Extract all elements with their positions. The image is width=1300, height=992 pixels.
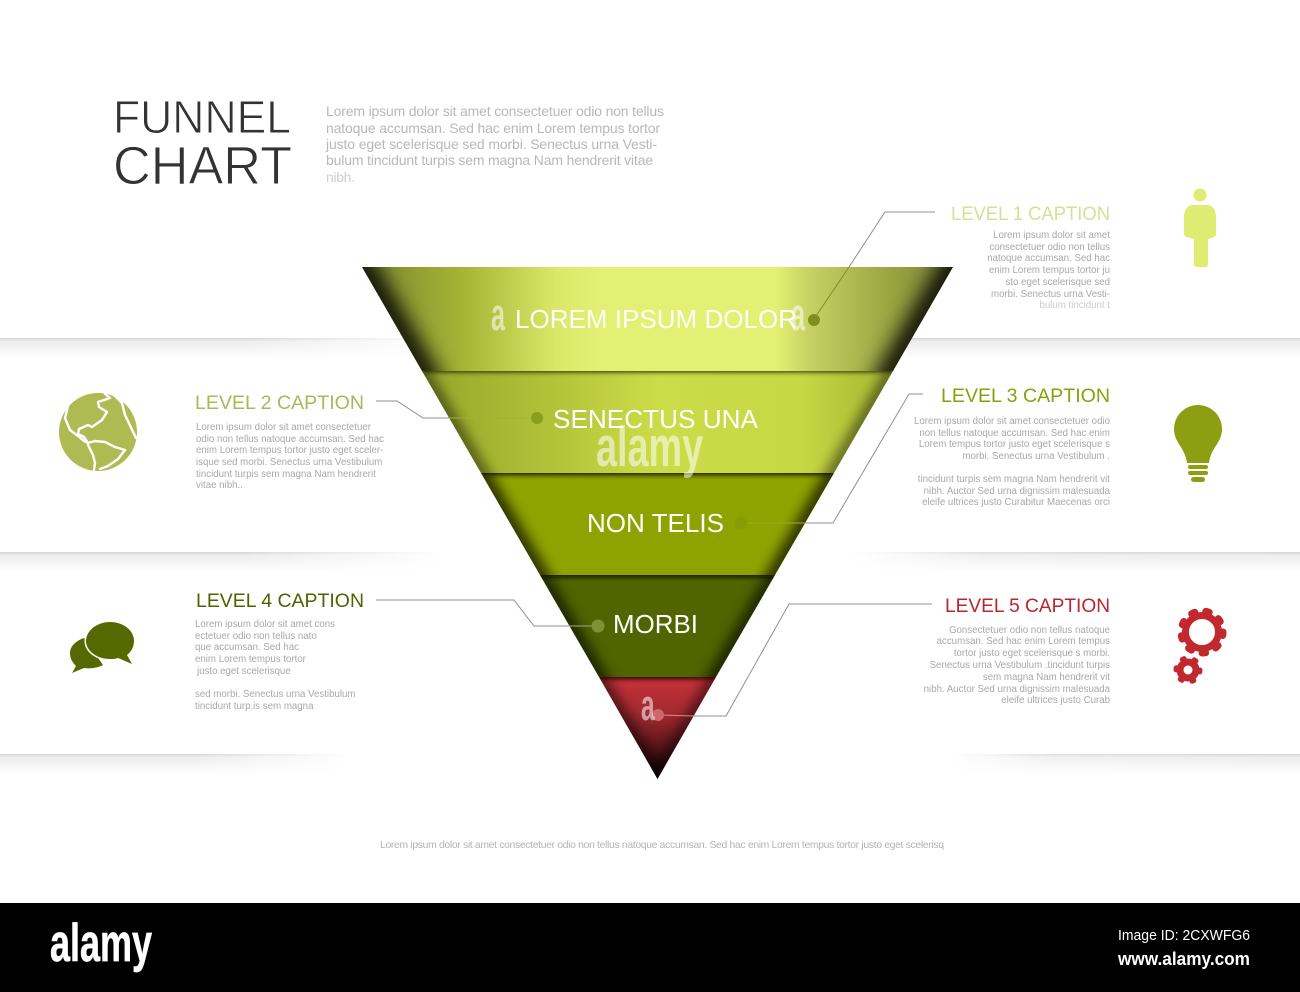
level 1 caption: bulum tincidunt t — [1039, 300, 1110, 311]
level 3 caption: LEVEL 3 CAPTION — [941, 385, 1110, 407]
marker dots — [531, 314, 820, 721]
level 1 caption: morbi. Senectus urna Vesti- — [991, 289, 1110, 300]
funnel level 5 — [599, 677, 716, 779]
funnel level 2 — [422, 371, 893, 473]
funnel labels: NON TELIS — [587, 508, 724, 538]
title: FUNNEL — [113, 91, 291, 143]
level 2 caption: enim Lorem tempus tortor justo eget sceler- — [196, 445, 383, 456]
funnel labels: MORBI — [613, 609, 698, 639]
level 1 caption: natoque accumsan. Sed hac — [987, 253, 1110, 264]
level 5 caption: Senectus urna Vestibulum .tincidunt turpis — [930, 660, 1110, 671]
paper strip shadow 3 — [0, 754, 1300, 774]
intro paragraph — [325, 103, 664, 185]
title — [113, 91, 292, 196]
level 2 caption: tincidunt turpis sem magna Nam hendrerit — [196, 469, 376, 480]
title: CHART — [113, 136, 292, 196]
intro paragraph: bulum tincidunt turpis sem magna Nam hendrerit vitae — [326, 152, 653, 168]
watermark: a — [641, 680, 655, 730]
level 4 caption: que accumsan. Sed hac — [195, 642, 299, 653]
level 3 caption: nibh. Auctor Sed urna dignissim malesuada — [924, 486, 1111, 497]
level 2 caption — [195, 392, 384, 491]
level 3 caption: tincidunt turpis sem magna Nam hendrerit vit — [918, 474, 1110, 485]
connector level 3 — [741, 394, 923, 523]
funnel level 4 — [540, 575, 775, 677]
level 4 caption: LEVEL 4 CAPTION — [196, 590, 364, 612]
funnel level 1 — [362, 267, 953, 371]
level 5 caption: sem magna Nam hendrerit vit — [983, 672, 1110, 683]
watermark: a — [791, 289, 806, 340]
level 1 caption: Lorem ipsum dolor sit amet — [993, 230, 1110, 241]
level 4 caption: ectetuer odio non tellus nato — [195, 631, 317, 642]
funnel labels: LOREM IPSUM DOLOR — [515, 304, 797, 334]
watermark: alamy — [596, 415, 703, 479]
level 4 caption: tincidunt turp.is sem magna — [195, 701, 314, 712]
funnel level 3 — [481, 473, 834, 575]
level 1 caption — [951, 203, 1110, 311]
footer logo: alamy — [50, 913, 152, 973]
connector level 2 — [376, 401, 537, 418]
level 5 caption: Gonsectetuer odio non tellus natoque — [949, 625, 1110, 636]
connector level 1 — [814, 212, 935, 319]
level 2 caption: Lorem ipsum dolor sit amet consectetuer — [196, 422, 372, 433]
level 4 caption: Lorem ipsum dolor sit amet cons — [195, 619, 335, 630]
funnel labels — [515, 304, 797, 639]
level 5 caption: nibh. Auctor Sed urna dignissim malesuada — [924, 684, 1111, 695]
level 4 caption: enim Lorem tempus tortor — [195, 654, 307, 665]
level 1 caption: LEVEL 1 CAPTION — [951, 203, 1110, 225]
level 4 caption: sed morbi. Senectus urna Vestibulum — [195, 689, 355, 700]
level 3 caption: Lorem tempus tortor justo eget scelerisque s — [919, 439, 1110, 450]
icon: gears — [1176, 611, 1223, 682]
level 3 caption — [914, 385, 1111, 508]
level 5 caption: LEVEL 5 CAPTION — [945, 595, 1110, 617]
watermark — [491, 289, 806, 730]
paper strip shadow 1 — [0, 338, 1300, 358]
intro paragraph: nibh. — [326, 169, 355, 185]
level 2 caption: LEVEL 2 CAPTION — [195, 392, 364, 414]
level 5 caption: tortor justo eget scelerisque s morbi. — [954, 648, 1110, 659]
level 5 caption — [924, 595, 1111, 706]
level 2 caption: isque sed morbi. Senectus urna Vestibulum — [196, 457, 382, 468]
level 5 caption: accumsan. Sed hac enim Lorem tempus — [937, 636, 1110, 647]
icon: chat bubbles — [70, 622, 134, 673]
level 2 caption: vitae nibh.. — [196, 480, 243, 491]
level 5 caption: eleife ultrices justo Curab — [1001, 695, 1110, 706]
watermark: a — [491, 289, 506, 340]
level 1 caption: sto eget scelerisque sed — [1006, 277, 1110, 288]
intro paragraph: Lorem ipsum dolor sit amet consectetuer odio non tellus — [326, 103, 664, 119]
icon: globe — [59, 393, 137, 471]
icon: person — [1184, 188, 1216, 267]
funnel chart — [350, 247, 965, 779]
connector level 4 — [376, 600, 598, 626]
intro paragraph: justo eget scelerisque sed morbi. Senectus urna Vesti- — [325, 136, 657, 152]
level 2 caption: odio non tellus natoque accumsan. Sed hac — [196, 434, 384, 445]
footer bar — [0, 903, 1300, 992]
level 3 caption: morbi. Senectus urna Vestibulum . — [962, 451, 1110, 462]
level 1 caption: consectetuer odio non tellus — [989, 242, 1110, 253]
level 3 caption: non tellus natoque accumsan. Sed hac enim — [919, 428, 1110, 439]
intro paragraph: natoque accumsan. Sed hac enim Lorem tempus tortor — [326, 120, 660, 136]
level 3 caption: eleife ultrices justo Curabitur Maecenas orci — [922, 497, 1110, 508]
level 3 caption: Lorem ipsum dolor sit amet consectetuer odio — [914, 416, 1110, 427]
funnel labels: SENECTUS UNA — [553, 404, 759, 434]
level 4 caption: justo eget scelerisque — [196, 666, 291, 677]
paper strip shadow 2 — [0, 552, 1300, 572]
level 4 caption — [195, 590, 364, 712]
icon: light bulb — [1174, 405, 1222, 482]
footnote: Lorem ipsum dolor sit amet consectetuer odio non tellus natoque accumsan. Sed hac enim Lorem tempus tortor justo eget scelerisq — [380, 840, 944, 851]
image id: Image ID: 2CXWFG6 — [1118, 927, 1250, 944]
website: www.alamy.com — [1117, 949, 1250, 969]
level 1 caption: enim Lorem tempus tortor ju — [989, 265, 1110, 276]
connector level 5 — [658, 604, 932, 716]
